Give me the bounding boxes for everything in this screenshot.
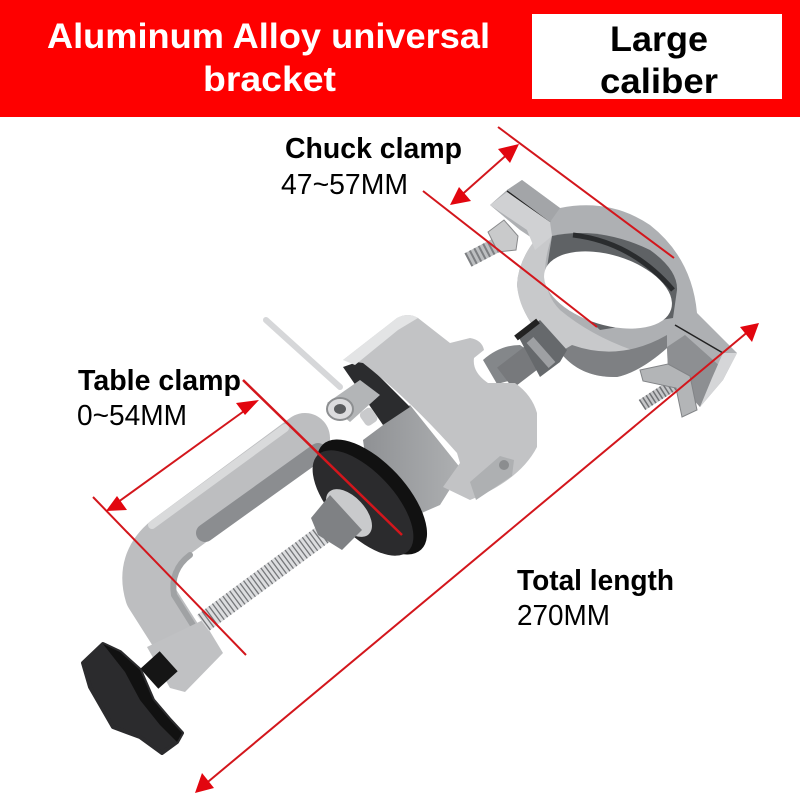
pad collar — [311, 481, 380, 550]
label: table clamp — [77, 365, 241, 432]
product photo: universal bracket — [83, 180, 737, 753]
clamp foot — [147, 620, 223, 692]
badge: large caliber: Large — [610, 20, 708, 59]
label: table clamp: 0~54MM — [77, 400, 187, 432]
knob — [83, 644, 182, 753]
dimension: total length — [195, 323, 759, 793]
header banner — [0, 0, 800, 117]
clamp screw — [203, 527, 333, 623]
wing bolt lower — [640, 364, 697, 417]
title — [47, 17, 490, 99]
wing bolt upper — [468, 220, 518, 260]
mounting cylinder — [363, 405, 462, 515]
title: Aluminum Alloy universal — [47, 17, 490, 56]
title: bracket — [203, 60, 336, 99]
housing — [343, 315, 537, 500]
label: chuck clamp: 47~57MM — [281, 169, 408, 201]
badge: large caliber — [532, 14, 782, 101]
badge: large caliber: caliber — [600, 62, 718, 101]
rubber clamp pad — [295, 421, 446, 573]
label: total length: Total length — [517, 565, 674, 597]
label: chuck clamp — [281, 133, 462, 201]
locking rod — [266, 320, 340, 387]
chuck clamp ring — [490, 180, 737, 407]
dimension: chuck clamp — [281, 127, 674, 327]
dimension: table clamp — [77, 365, 402, 655]
hex nut and inner mechanism — [327, 360, 410, 427]
C-clamp frame — [147, 428, 318, 650]
ball joint — [483, 320, 567, 384]
label: chuck clamp: Chuck clamp — [285, 133, 462, 165]
label: total length: 270MM — [517, 600, 610, 632]
label: table clamp: Table clamp — [78, 365, 241, 397]
label: total length — [517, 565, 674, 632]
